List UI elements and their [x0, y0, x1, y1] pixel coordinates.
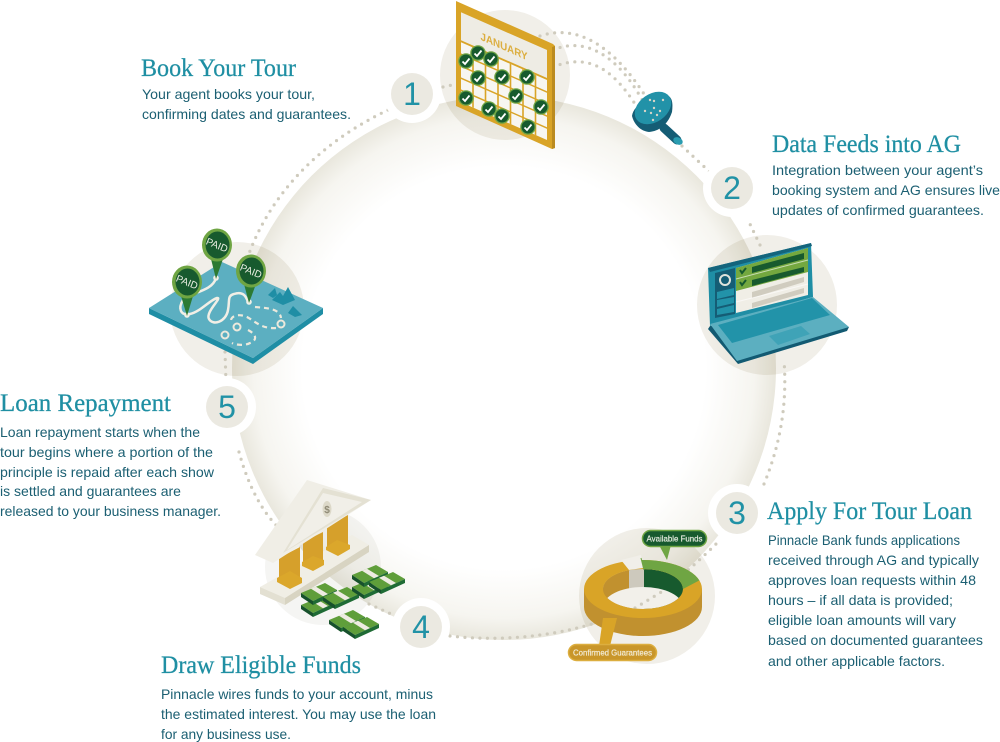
step 4 heading and text: Draw Eligible Funds [161, 652, 361, 679]
step 4 heading and text: Pinnacle wires funds to your account, minus [161, 686, 433, 702]
icon: cash stacks [301, 565, 405, 639]
icon: bank: $ [324, 505, 330, 516]
step 2 heading and text: updates of confirmed guarantees. [772, 202, 984, 218]
step 3 heading and text: Pinnacle Bank funds applications [768, 532, 960, 548]
step 1 heading and text: Book Your Tour [141, 55, 297, 82]
icon: donut chart [584, 555, 702, 636]
central ring background [232, 96, 776, 640]
pin 2 [202, 228, 232, 279]
pin 3: PAID [238, 263, 263, 281]
dotted connector path [225, 33, 785, 638]
step 2 heading and text: Data Feeds into AG [772, 131, 961, 158]
step 1 heading and text [141, 55, 351, 122]
step 5 heading and text: Loan repayment starts when the [0, 424, 200, 440]
label: available funds: Available Funds [646, 534, 702, 544]
step 5 number [198, 378, 256, 436]
icon: calendar [456, 1, 555, 149]
step 4 heading and text: the estimated interest. You may use the loan [161, 706, 436, 722]
step 3 heading and text: and other applicable factors. [768, 653, 945, 669]
step 2 heading and text: Integration between your agent’s [772, 162, 983, 178]
step 5 heading and text: tour begins where a portion of the [0, 444, 213, 460]
step 4 number [392, 598, 450, 656]
step 1 number: 1 [403, 76, 421, 112]
step 3 heading and text: received through AG and typically [768, 552, 979, 568]
icon: map with paid pins [149, 228, 323, 364]
step 1 heading and text: confirming dates and guarantees. [142, 106, 351, 122]
step 5 heading and text: principle is repaid after each show [0, 464, 215, 480]
pin 3 [236, 254, 266, 303]
step 2 number [703, 159, 761, 217]
step 4 heading and text: for any business use. [161, 726, 291, 742]
icon: laptop [708, 243, 849, 364]
step 2 heading and text [772, 131, 1000, 218]
pin 2: PAID [204, 237, 229, 255]
icon: bank [255, 480, 371, 605]
step 5 heading and text [0, 390, 221, 519]
pin 1 [172, 266, 202, 316]
step 2 number: 2 [723, 170, 741, 206]
pin 1: PAID [174, 274, 199, 292]
step 4 number: 4 [412, 609, 430, 645]
step 3 number [708, 484, 766, 542]
label: confirmed guarantees: Confirmed Guarantees [573, 648, 652, 658]
step 1 heading and text: Your agent books your tour, [142, 86, 315, 102]
step 5 number: 5 [218, 389, 236, 425]
label: confirmed guarantees [568, 618, 656, 660]
step 3 heading and text [767, 498, 983, 669]
step 5 heading and text: released to your business manager. [0, 503, 221, 519]
step 3 heading and text: approves loan requests within 48 [768, 572, 976, 588]
step 2 heading and text: booking system and AG ensures live [772, 182, 1000, 198]
label: available funds [642, 530, 706, 560]
step 4 heading and text [161, 652, 436, 742]
step 3 number: 3 [728, 495, 746, 531]
step 5 heading and text: Loan Repayment [0, 390, 171, 417]
icon: funnel [629, 85, 684, 146]
step 1 number [383, 65, 441, 123]
columns [277, 515, 350, 589]
icon: calendar: JANUARY [481, 31, 528, 63]
step 3 heading and text: eligible loan amounts will vary [768, 612, 956, 628]
step 5 heading and text: is settled and guarantees are [0, 483, 181, 499]
step 3 heading and text: hours – if all data is provided; [768, 592, 953, 608]
step 3 heading and text: Apply For Tour Loan [767, 498, 972, 525]
step 3 heading and text: based on documented guarantees [768, 632, 983, 648]
illustration backdrops [170, 10, 837, 664]
